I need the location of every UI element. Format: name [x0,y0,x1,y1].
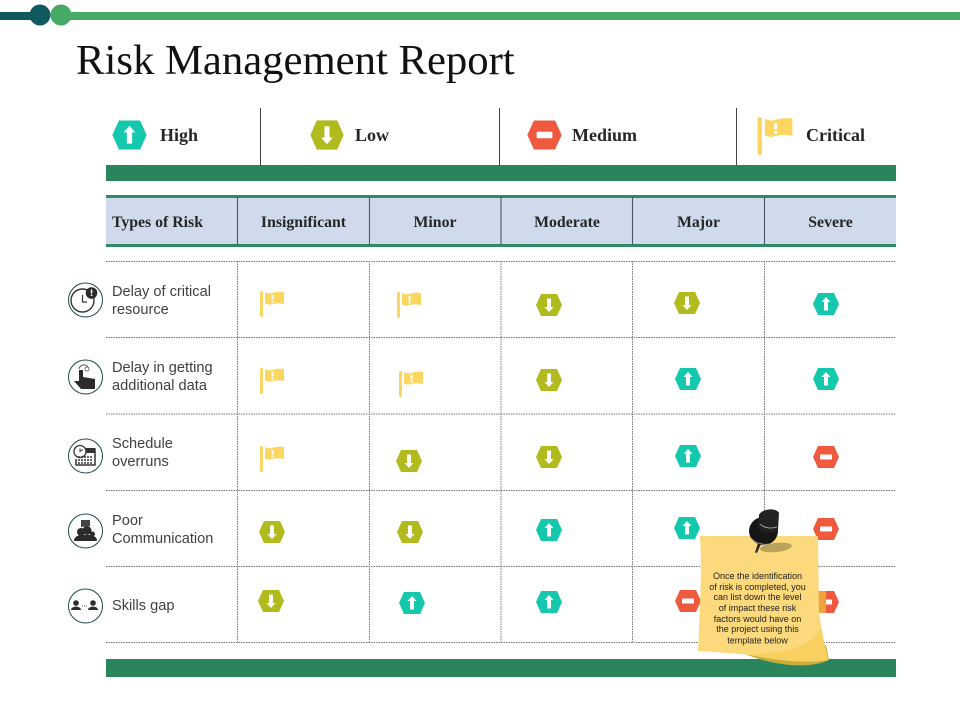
legend: medium: Medium [572,125,637,145]
sticky note callout [698,509,829,665]
sticky note text: Once the identification [713,571,802,581]
row label: schedule overruns: Schedule [112,436,173,452]
row label: schedule overruns: overruns [112,454,169,470]
sticky note paper [698,536,829,665]
sticky note text: of impact these risk [719,603,797,613]
legend: high [112,120,198,150]
sticky note text: factors would have on [714,614,801,624]
legend: critical [758,117,865,155]
risk markers: row 3 [260,445,839,472]
table header [106,195,896,247]
table header: Moderate [534,214,600,231]
table header: Types of Risk [112,214,203,231]
table header: Insignificant [261,214,347,231]
row label: poor communication: Communication [112,531,213,547]
risk markers: row 2 [260,368,839,397]
table header: Severe [808,214,853,231]
decorative header bar [0,4,960,26]
icon: poor communication [68,514,102,548]
icon: touch hand [68,360,102,394]
icon: schedule calendar [68,439,102,473]
icon: clock alert [68,283,102,317]
sticky note text: the project using this [716,624,799,634]
row label: delay in getting additional data: additional data [112,378,208,394]
sticky note text: can list down the level [713,592,802,602]
risk markers: row 5 [258,590,839,614]
legend: low: Low [355,125,389,145]
sticky note text: template below [727,636,788,646]
legend: high: High [160,125,198,145]
legend: low [310,120,389,150]
table header: Major [677,214,720,231]
table grid [106,261,896,642]
table header: Minor [414,214,456,231]
risk markers: row 1 [260,291,839,318]
row label: delay of critical resource: resource [112,302,169,318]
sticky note text: of risk is completed, you [709,582,806,592]
icon: skills gap [68,589,102,623]
legend green bar [106,165,896,181]
legend panel [112,108,865,165]
bottom green bar [106,659,896,677]
title: Risk Management Report [76,37,515,84]
row label: skills gap: Skills gap [112,598,174,614]
legend: critical: Critical [806,125,865,145]
risk markers: row 4 [259,517,839,543]
row label: poor communication: Poor [112,513,143,529]
icon: push pin [749,509,792,554]
sticky note text [709,571,806,646]
row labels [112,284,213,614]
legend: medium [527,120,637,150]
row label: delay in getting additional data: Delay in getting [112,360,213,376]
row label: delay of critical resource: Delay of critical [112,284,211,300]
